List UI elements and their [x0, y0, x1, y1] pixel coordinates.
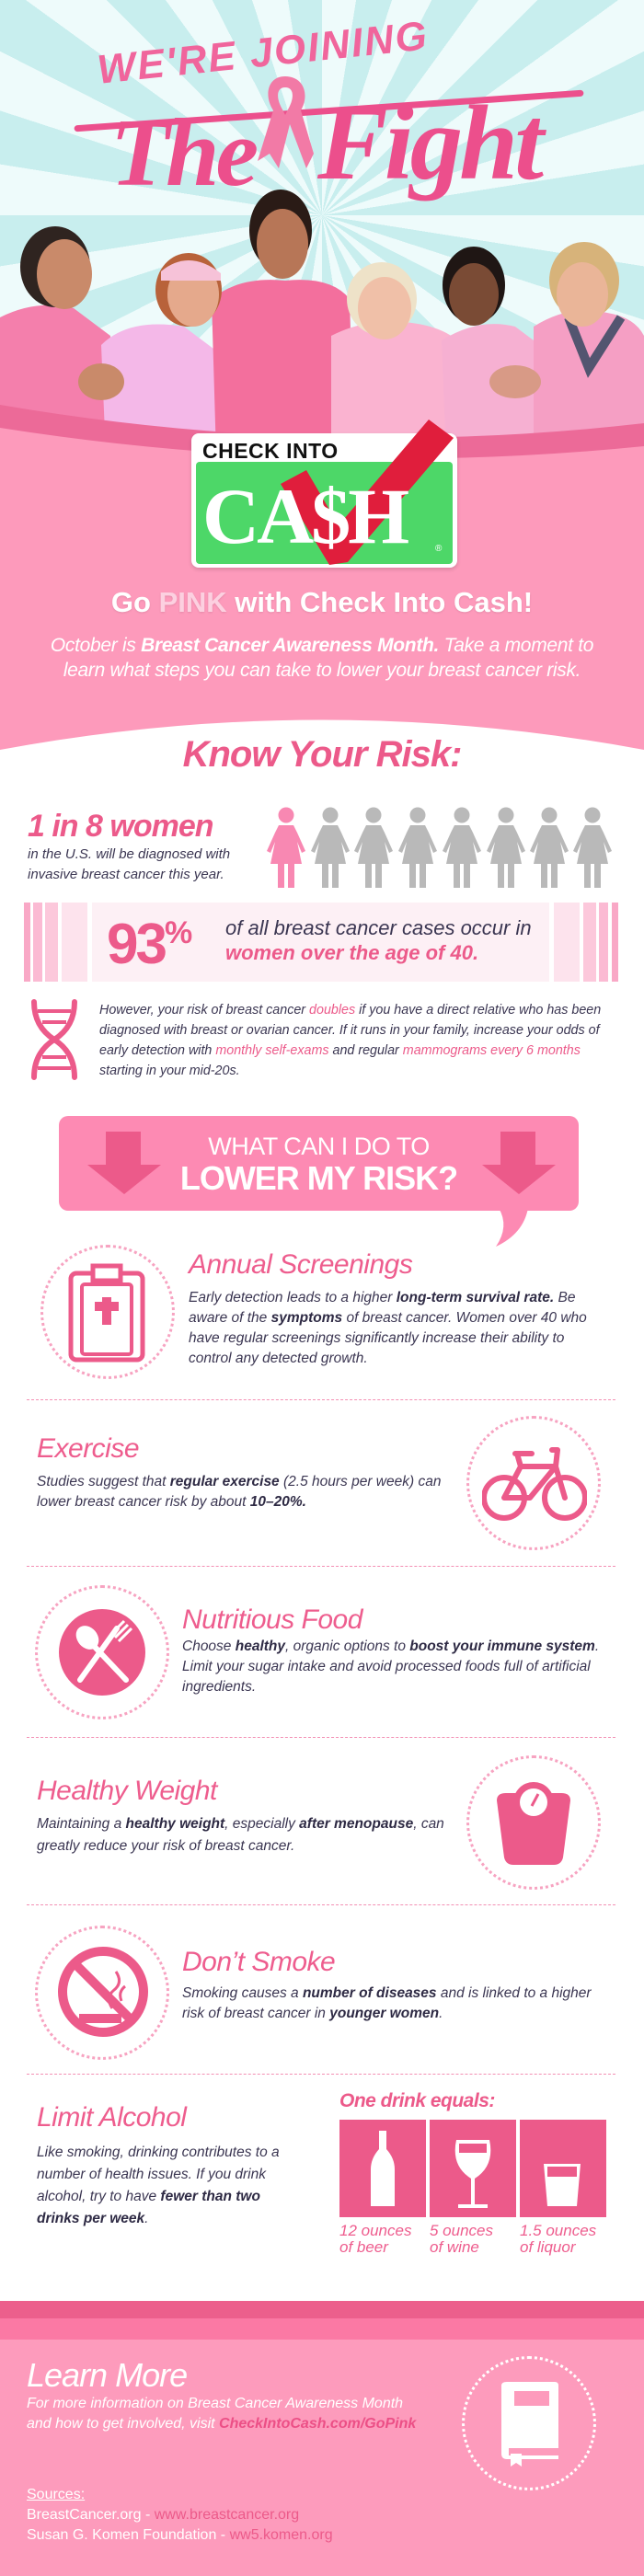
panel: annual screenings	[40, 1245, 587, 1379]
footer: learn more: Learn More	[27, 2356, 187, 2394]
photo: group of women in pink	[0, 190, 644, 437]
heading: WE'RE JOINING: WE'RE JOINING	[95, 13, 431, 93]
callout: what can I do: WHAT CAN I DO TO	[208, 1133, 430, 1160]
stat band: 93%: women over the age of 40.	[225, 941, 478, 964]
arrow left	[87, 1132, 161, 1194]
logo: Check Into Cash: ®	[435, 544, 442, 554]
logo: Check Into Cash	[191, 433, 457, 568]
stat band: 93%	[24, 903, 618, 982]
chart: one drink equals: 5 ounces	[430, 2222, 493, 2239]
heading: The Fight: The	[110, 98, 255, 206]
icon: scale	[466, 1755, 601, 1890]
footer: learn more: Sources:	[27, 2487, 85, 2502]
stat: 1 in 8 women: 1 in 8 women	[28, 809, 213, 844]
panel: annual screenings: Annual Screenings	[189, 1249, 412, 1280]
stat band: 93%: of all breast cancer cases occur in	[225, 916, 532, 939]
chart: one drink equals: of wine	[430, 2238, 479, 2256]
footer: learn more: For more information on Breast Cancer Awareness Month	[27, 2396, 403, 2411]
header background with rays	[0, 0, 644, 478]
callout: what can I do	[59, 1116, 579, 1247]
panel: healthy weight	[37, 1755, 601, 1890]
heading: The Fight	[74, 85, 583, 206]
icon: bicycle	[466, 1416, 601, 1550]
intro text: learn what steps you can take to lower your breast cancer risk.	[63, 660, 581, 681]
heading: The Fight: Fight	[317, 85, 540, 201]
chart: one drink equals: of beer	[339, 2238, 388, 2256]
text: family risk: However, your risk of breast cancer doubles if you have a direct relative who has been diagnosed with breast or ovarian cancer. If it runs in your family, increase your odds of early detection with monthly self-exams and regular mammograms every 6 months starting in your mid-20s.	[99, 1003, 601, 1078]
icon: liquor glass	[520, 2120, 606, 2217]
intro text	[51, 635, 593, 681]
pink banner background with waves	[0, 405, 644, 750]
pictogram: 1 in 8 women	[267, 808, 612, 888]
arrow right	[482, 1132, 556, 1194]
icon: wine glass	[430, 2120, 516, 2217]
intro text: October is Breast Cancer Awareness Month. Take a moment to	[51, 635, 593, 656]
icon: book	[462, 2356, 596, 2490]
footer: learn more	[0, 2301, 644, 2576]
panel: limit alcohol: Limit Alcohol	[37, 2102, 186, 2133]
heading: Go PINK: Go PINK with Check Into Cash!	[111, 586, 533, 618]
title: We're joining the fight	[74, 13, 583, 206]
panel: don't smoke: Don’t Smoke	[182, 1947, 335, 1977]
panel: exercise	[37, 1416, 601, 1550]
panel: healthy weight: Healthy Weight	[37, 1776, 217, 1806]
panel: limit alcohol	[37, 2102, 280, 2226]
icon: pink ribbon	[258, 76, 314, 168]
panel: nutritious food: Nutritious Food	[182, 1604, 362, 1635]
chart: one drink equals: of liquor	[520, 2238, 575, 2256]
panel: healthy weight: Maintaining a healthy weight, especially after menopause, can greatly reduce your risk of breast cancer.	[37, 1816, 444, 1854]
icon: DNA	[31, 999, 77, 1080]
logo: Check Into Cash: CHECK INTO	[202, 439, 339, 463]
icon: beer bottle	[339, 2120, 426, 2217]
panel: exercise: Studies suggest that regular exercise (2.5 hours per week) can lower breast cancer risk by about 10–20%.	[37, 1474, 441, 1510]
chart: one drink equals: 12 ounces	[339, 2222, 411, 2239]
chart: one drink equals	[339, 2090, 606, 2256]
panel: don't smoke: Smoking causes a number of diseases and is linked to a higher risk of breast cancer in younger women.	[182, 1985, 592, 2021]
panel: annual screenings: Early detection leads to a higher long-term survival rate. Be aware of the symptoms of breast cancer. Women over 40 who have regular screenings significantly increase their ability to control any detected growth.	[189, 1290, 587, 1366]
panel: limit alcohol: Like smoking, drinking contributes to a number of health issues. If you drink alcohol, try to have fewer than two drinks per week.	[37, 2145, 280, 2226]
stat band: 93%: 93%	[107, 913, 190, 976]
footer: learn more: and how to get involved, visit CheckIntoCash.com/GoPink	[27, 2416, 416, 2432]
panel: don't smoke	[35, 1926, 592, 2060]
heading: Know Your Risk: Know Your Risk:	[183, 734, 461, 775]
callout: what can I do: LOWER MY RISK?	[180, 1159, 457, 1197]
footer: learn more: Susan G. Komen Foundation - ww5.komen.org	[27, 2527, 333, 2543]
chart: one drink equals: 1.5 ounces	[520, 2222, 596, 2239]
stat: 1 in 8 women: in the U.S. will be diagnosed with invasive breast cancer this year.	[28, 846, 230, 882]
panel: nutritious food	[35, 1585, 599, 1719]
icon: no smoking	[35, 1926, 169, 2060]
icon: fork and spoon	[35, 1585, 169, 1719]
panel: exercise: Exercise	[37, 1433, 139, 1464]
panel: nutritious food: Choose healthy, organic options to boost your immune system. Limit your sugar intake and avoid processed foods full of artificial ingredients.	[182, 1639, 599, 1695]
stat: 1 in 8 women	[28, 809, 230, 882]
chart: one drink equals: One drink equals:	[339, 2090, 495, 2111]
footer: learn more: BreastCancer.org - www.breastcancer.org	[27, 2507, 299, 2523]
icon: clipboard	[40, 1245, 175, 1379]
logo: Check Into Cash: CA$H	[202, 472, 407, 560]
